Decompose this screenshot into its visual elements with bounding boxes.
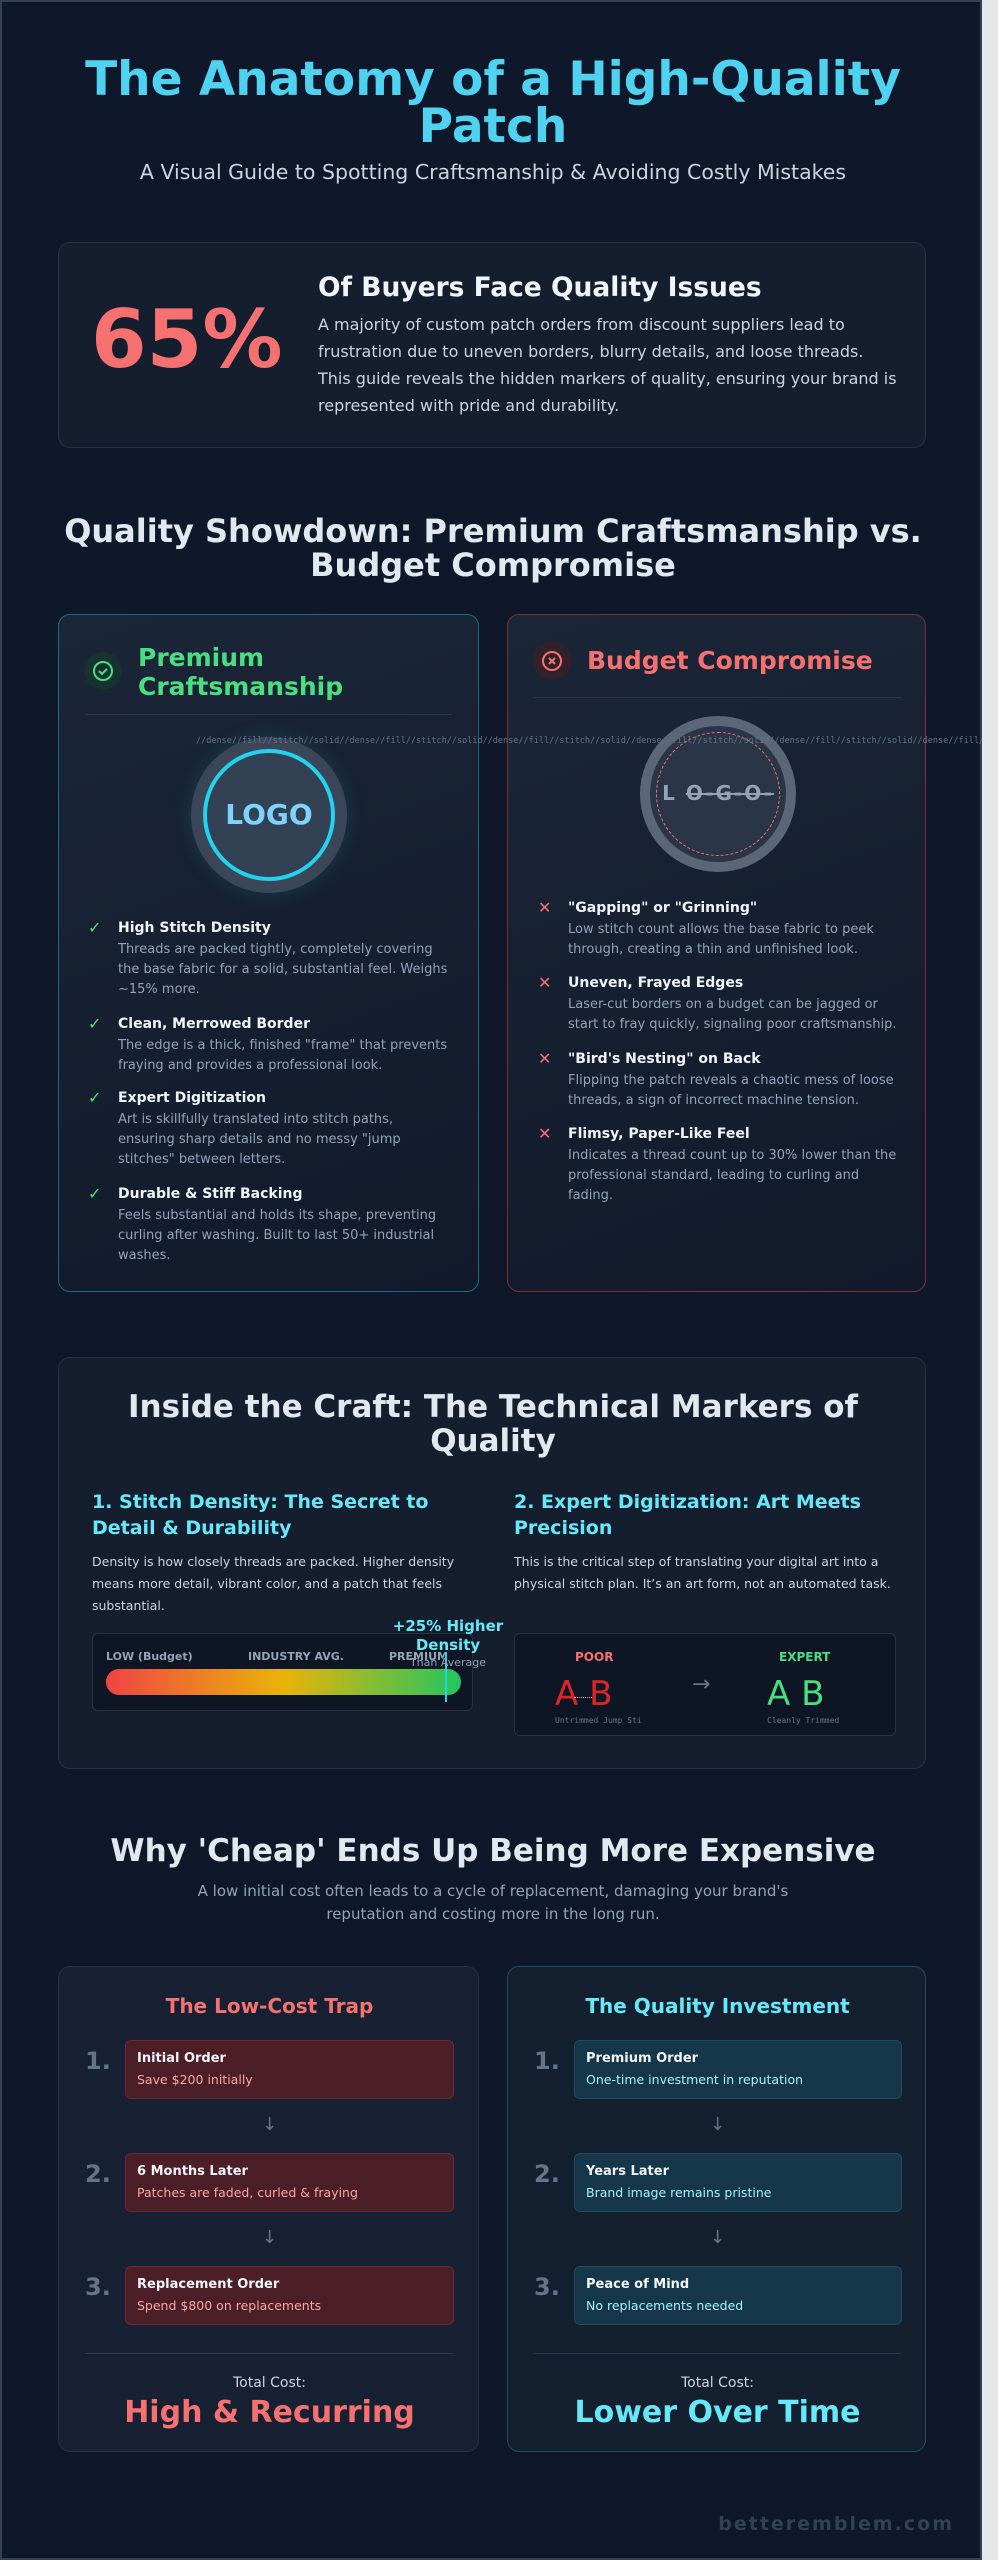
digitization comparison: A B <box>555 1674 612 1714</box>
panel: budget: Laser-cut borders on a budget can be jagged or start to fray quickly, signaling poor craftsmanship. <box>568 997 897 1032</box>
step 3: No replacements needed <box>586 2298 743 2313</box>
digitization comparison: EXPERT <box>779 1650 830 1664</box>
panel: budget: ✕ <box>538 1049 551 1068</box>
heading: The Low-Cost Trap <box>166 1994 373 2018</box>
step 2 <box>125 2153 454 2212</box>
panel: quality investment <box>507 1966 926 2452</box>
list: Threads are packed tightly, completely covering the base fabric for a solid, substantial feel. Weighs ~15% more. <box>118 942 447 997</box>
panel: premium: ✓ <box>88 1014 101 1033</box>
density bar chart: INDUSTRY AVG. <box>248 1650 344 1663</box>
digitization comparison: A B <box>767 1674 824 1714</box>
panel: low-cost trap: 1. <box>85 2047 111 2075</box>
step 1: Save $200 initially <box>137 2072 253 2087</box>
panel: budget: Flipping the patch reveals a chaotic mess of loose threads, a sign of incorrect machine tension. <box>568 1073 894 1108</box>
step 3: Spend $800 on replacements <box>137 2298 321 2313</box>
title: The Anatomy of a High-Quality Patch <box>85 52 901 154</box>
heading: Quality <box>430 1423 556 1459</box>
panel: budget: ✕ <box>538 898 551 917</box>
icon: check circle <box>84 652 122 690</box>
panel: premium <box>58 614 479 1292</box>
heading: The Quality Investment <box>585 1994 850 2018</box>
step 3: Peace of Mind <box>586 2277 689 2292</box>
digitization comparison <box>514 1633 896 1736</box>
step 1 <box>574 2040 902 2099</box>
panel: quality investment: 3. <box>534 2273 560 2301</box>
step 2 <box>574 2153 902 2212</box>
patch logo: LOGO <box>225 798 313 831</box>
heading <box>138 643 343 701</box>
heading <box>128 1389 858 1459</box>
section heading: showdown: Budget Compromise <box>310 546 676 584</box>
panel: quality investment: ↓ <box>710 2114 725 2135</box>
heading: Craftsmanship <box>138 672 343 701</box>
step 3 <box>125 2266 454 2325</box>
icon: x circle <box>533 642 571 680</box>
panel: low-cost trap: ↓ <box>262 2227 277 2248</box>
panel: inside the craft <box>58 1357 926 1769</box>
callout: +25% Higher Density <box>393 1617 503 1654</box>
subtitle: A Visual Guide to Spotting Craftsmanship & Avoiding Costly Mistakes <box>140 160 846 184</box>
stat card <box>58 242 926 448</box>
panel: premium: Feels substantial and holds its shape, preventing curling after washing. Built to last 50+ industrial washes. <box>118 1208 436 1263</box>
section heading: showdown: Quality Showdown: Premium Craftsmanship vs. <box>64 512 922 550</box>
step 2: Years Later <box>586 2164 669 2179</box>
panel: quality investment: 1. <box>534 2047 560 2075</box>
step 1: Premium Order <box>586 2051 698 2066</box>
col 2 text: This is the critical step of translating your digital art into a physical stitch plan. It’s an art form, not an automated task. <box>514 1554 891 1591</box>
stat body: A majority of custom patch orders from discount suppliers lead to frustration due to uneven borders, blurry details, and loose threads. This guide reveals the hidden markers of quality, ensuring your brand is represented with pride and durability. <box>318 315 897 415</box>
panel: budget: Flimsy, Paper-Like Feel <box>568 1126 750 1142</box>
panel: low-cost trap: ↓ <box>262 2114 277 2135</box>
step 2: Brand image remains pristine <box>586 2185 771 2200</box>
heading: Premium <box>138 643 264 672</box>
panel: budget: "Bird's Nesting" on Back <box>568 1051 761 1067</box>
footer brand: betteremblem.com <box>718 2513 954 2535</box>
stat heading: Of Buyers Face Quality Issues <box>318 272 762 303</box>
digitization comparison: Cleanly Trimmed <box>767 1716 839 1725</box>
panel: low-cost trap <box>58 1966 479 2452</box>
callout: Than Average <box>410 1656 486 1669</box>
list <box>538 898 874 957</box>
col 2 heading: 2. Expert Digitization: Art Meets Precision <box>514 1491 861 1539</box>
list: "Gapping" or "Grinning" <box>568 900 757 916</box>
panel: premium: Expert Digitization <box>118 1090 266 1106</box>
step 3 <box>574 2266 902 2325</box>
panel: budget <box>507 614 926 1292</box>
panel: budget: ✕ <box>538 1124 551 1143</box>
col 1 heading: 1. Stitch Density: The Secret to Detail & Durability <box>92 1491 428 1539</box>
heading: Budget Compromise <box>587 646 873 675</box>
panel: quality investment: Lower Over Time <box>574 2395 861 2430</box>
panel: premium: ✓ <box>88 918 101 937</box>
digitization comparison: POOR <box>575 1650 613 1664</box>
density bar chart: LOW (Budget) <box>106 1650 193 1663</box>
section heading: cheap: Why 'Cheap' Ends Up Being More Expensive <box>110 1833 876 1869</box>
digitization comparison: → <box>692 1672 710 1697</box>
panel: premium: The edge is a thick, finished "frame" that prevents fraying and provides a professional look. <box>118 1038 447 1073</box>
patch logo <box>191 737 347 893</box>
total: Total Cost: <box>233 2375 306 2391</box>
density bar chart: PREMIUM <box>389 1650 448 1663</box>
step 1: Initial Order <box>137 2051 226 2066</box>
panel: premium: ✓ <box>88 1184 101 1203</box>
section subtitle: A low initial cost often leads to a cycle of replacement, damaging your brand's reputation and costing more in the long run. <box>198 1882 788 1923</box>
panel: low-cost trap: High & Recurring <box>124 2395 415 2430</box>
step 2: 6 Months Later <box>137 2164 248 2179</box>
step 1 <box>125 2040 454 2099</box>
col 1 text: Density is how closely threads are packed. Higher density means more detail, vibrant color, and a patch that feels substantial. <box>92 1554 454 1613</box>
patch logo budget: L O-G-O- <box>662 781 774 805</box>
step 1: One-time investment in reputation <box>586 2072 803 2087</box>
patch logo budget <box>640 716 796 872</box>
panel: premium: Clean, Merrowed Border <box>118 1016 310 1032</box>
panel: low-cost trap: 3. <box>85 2273 111 2301</box>
panel: budget: Indicates a thread count up to 30% lower than the professional standard, leading to curling and fading. <box>568 1148 896 1203</box>
panel: budget: Uneven, Frayed Edges <box>568 975 743 991</box>
panel: premium: Durable & Stiff Backing <box>118 1186 303 1202</box>
panel: premium: Art is skillfully translated into stitch paths, ensuring sharp details and no messy "jump stitches" between letters. <box>118 1112 401 1167</box>
panel: low-cost trap: 2. <box>85 2160 111 2188</box>
density bar chart <box>92 1633 473 1711</box>
list: High Stitch Density <box>118 920 271 936</box>
step 2: Patches are faded, curled & fraying <box>137 2185 358 2200</box>
heading: Inside the Craft: The Technical Markers of <box>128 1389 858 1425</box>
big stat: 65% <box>91 293 282 386</box>
panel: premium: ✓ <box>88 1088 101 1107</box>
list <box>88 918 447 997</box>
list: Low stitch count allows the base fabric to peek through, creating a thin and unfinished look. <box>568 922 874 957</box>
panel: budget: ✕ <box>538 973 551 992</box>
step 3: Replacement Order <box>137 2277 279 2292</box>
digitization comparison: Untrimmed Jump Sti <box>555 1716 642 1725</box>
section heading: showdown <box>64 512 922 584</box>
total: Total Cost: <box>681 2375 754 2391</box>
panel: quality investment: 2. <box>534 2160 560 2188</box>
panel: quality investment: ↓ <box>710 2227 725 2248</box>
